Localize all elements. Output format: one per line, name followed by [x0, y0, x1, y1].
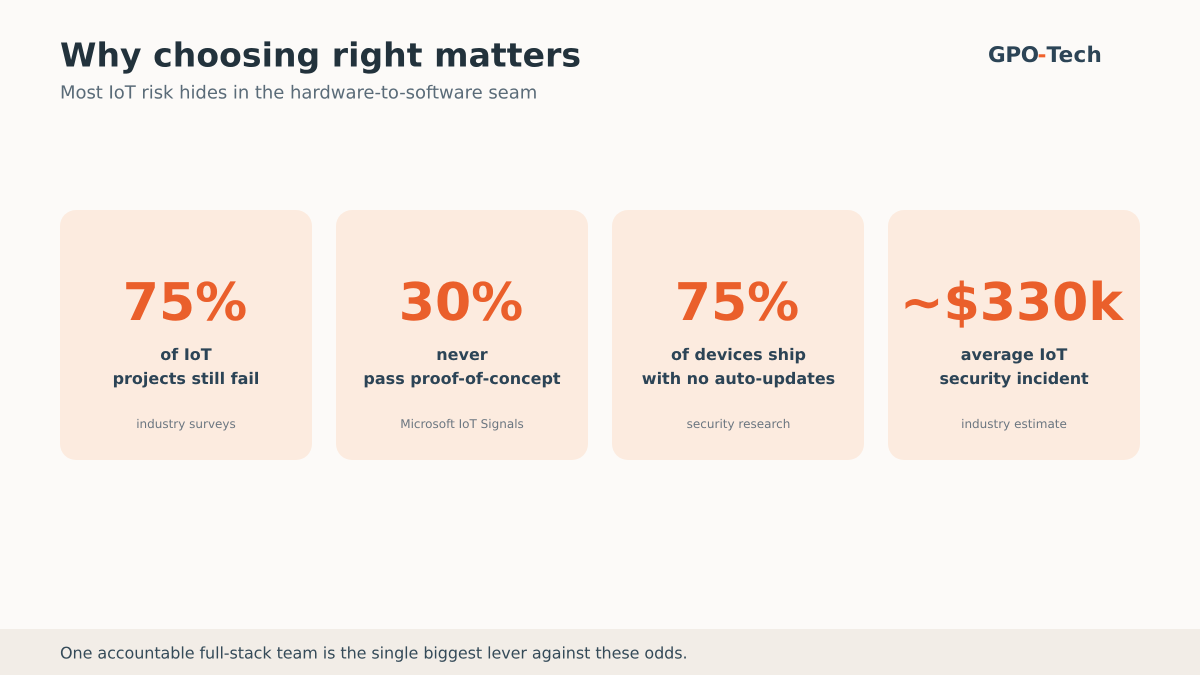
source: industry estimate — [961, 417, 1067, 431]
logo: GPO-Tech: GPO — [988, 43, 1039, 68]
description: of IoT — [160, 345, 212, 364]
source: security research — [687, 417, 790, 431]
stat: ~$330k: ~$330k — [900, 273, 1124, 333]
panel: stat card 1 — [60, 210, 312, 460]
footer text: One accountable full-stack team is the single biggest lever against these odds. — [60, 644, 688, 662]
subtitle: Most IoT risk hides in the hardware-to-software seam — [60, 82, 537, 104]
description: of devices ship — [671, 345, 806, 364]
description: security incident — [940, 369, 1089, 388]
description: with no auto-updates — [642, 369, 835, 388]
stat: 75%: 75% — [123, 273, 247, 333]
source: industry surveys — [136, 417, 236, 431]
panel: stat card 4 — [888, 210, 1140, 460]
logo: GPO-Tech: Tech — [1046, 43, 1102, 68]
stat: 75%: 75% — [675, 273, 799, 333]
footer band — [0, 629, 1200, 675]
source: Microsoft IoT Signals — [400, 417, 524, 431]
logo: GPO-Tech: - — [1038, 43, 1046, 68]
description: never — [436, 345, 488, 364]
description: average IoT — [961, 345, 1067, 364]
panel: stat card 3 — [612, 210, 864, 460]
description: pass proof-of-concept — [363, 369, 561, 388]
title: Why choosing right matters — [60, 36, 581, 74]
description: projects still fail — [113, 369, 259, 388]
panel: stat card 2 — [336, 210, 588, 460]
stat: 30%: 30% — [399, 273, 523, 333]
